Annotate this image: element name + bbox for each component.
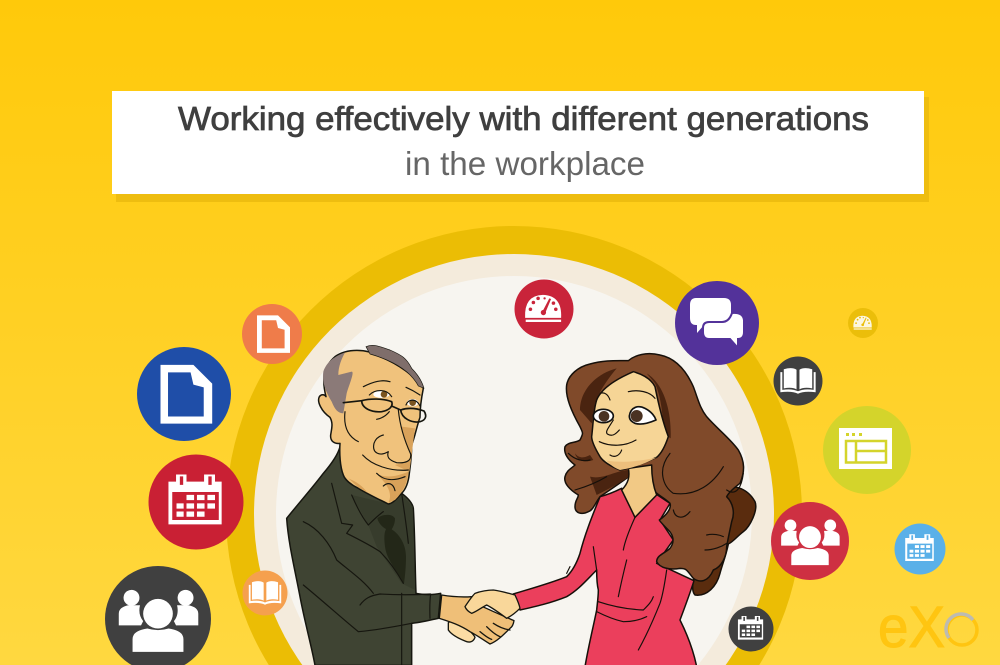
icon: red calendar — [148, 454, 244, 550]
icon: blue calendar — [894, 524, 946, 574]
central circle backdrop — [226, 226, 802, 665]
illustration: young woman — [513, 354, 756, 665]
icon: dark calendar — [728, 606, 774, 652]
icon: dark book — [774, 356, 822, 406]
icon: purple chat — [675, 281, 759, 365]
illustration: handshake — [439, 590, 520, 644]
icon: dark people — [105, 566, 211, 665]
icon: orange document — [242, 304, 302, 364]
title card — [112, 91, 929, 202]
icon: lime layout — [823, 406, 911, 494]
icon: blue document — [137, 347, 231, 441]
icon: red people — [771, 502, 849, 580]
logo: eXo: eX — [878, 595, 945, 660]
subtitle: in the workplace — [405, 145, 645, 182]
title: Working effectively with different generations — [178, 100, 869, 137]
icon: orange book — [242, 570, 288, 616]
illustration: older man — [287, 345, 441, 665]
icon: gold gauge — [848, 308, 878, 338]
icon: red gauge — [514, 280, 574, 338]
